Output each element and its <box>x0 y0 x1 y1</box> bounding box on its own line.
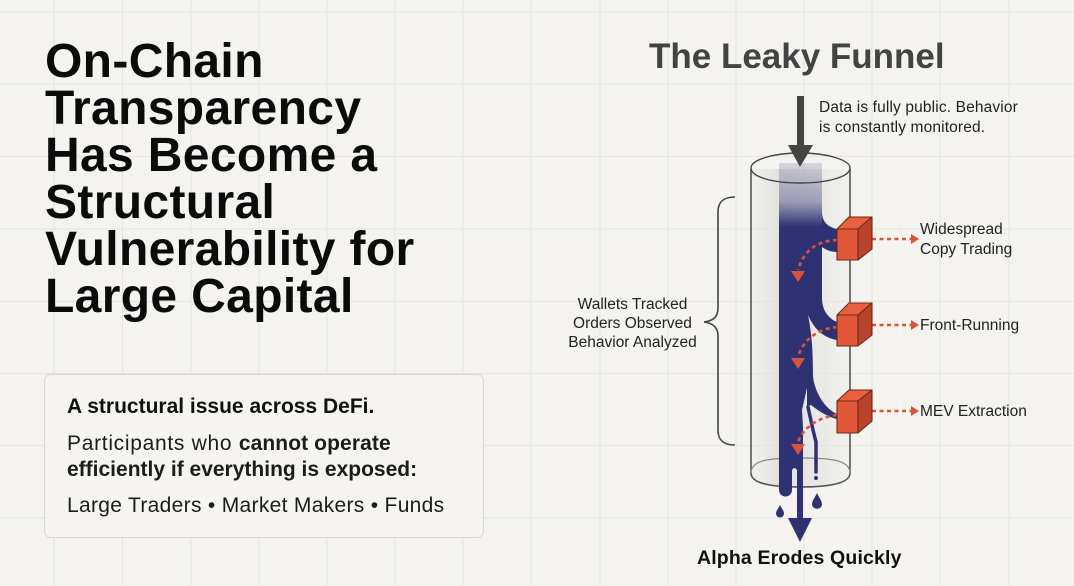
label: copy trading: Widespread <box>920 221 1003 238</box>
panel heading: A structural issue across DeFi. <box>67 395 374 418</box>
title: On-Chain <box>45 35 264 88</box>
diagram heading: The Leaky Funnel <box>649 37 945 76</box>
title <box>45 35 415 323</box>
label: front-running: Front-Running <box>920 317 1019 334</box>
bracket <box>704 197 735 445</box>
input caption: is constantly monitored. <box>819 119 985 136</box>
input caption: Data is fully public. Behavior <box>819 99 1018 116</box>
label: mev extraction: MEV Extraction <box>920 403 1027 420</box>
title: Transparency <box>45 82 361 135</box>
panel body text <box>67 432 417 481</box>
bracket label <box>568 296 697 351</box>
input arrow <box>788 96 813 167</box>
input caption <box>819 99 1018 136</box>
output arrow <box>788 465 812 542</box>
leak arrowheads <box>791 234 919 455</box>
panel: structural issue <box>44 374 484 538</box>
panel body text: Participants who cannot operate <box>67 432 391 455</box>
participants list: Large Traders • Market Makers • Funds <box>67 494 444 517</box>
output label: Alpha Erodes Quickly <box>697 547 902 569</box>
bracket label: Orders Observed <box>573 315 692 332</box>
title: Vulnerability for <box>45 223 415 276</box>
bracket label: Wallets Tracked <box>578 296 687 313</box>
title: Has Become a <box>45 129 377 182</box>
title: Structural <box>45 176 275 229</box>
red boxes <box>837 217 872 433</box>
cylinder body <box>751 169 850 487</box>
label: copy trading: Copy Trading <box>920 241 1012 258</box>
panel body text: efficiently if everything is exposed: <box>67 458 417 481</box>
bracket label: Behavior Analyzed <box>568 334 697 351</box>
liquid stream <box>776 163 837 518</box>
title: Large Capital <box>45 270 354 323</box>
leak dashed arrows <box>798 239 912 442</box>
drops <box>776 505 784 518</box>
label: copy trading <box>920 221 1012 258</box>
cylinder rim <box>751 153 850 183</box>
